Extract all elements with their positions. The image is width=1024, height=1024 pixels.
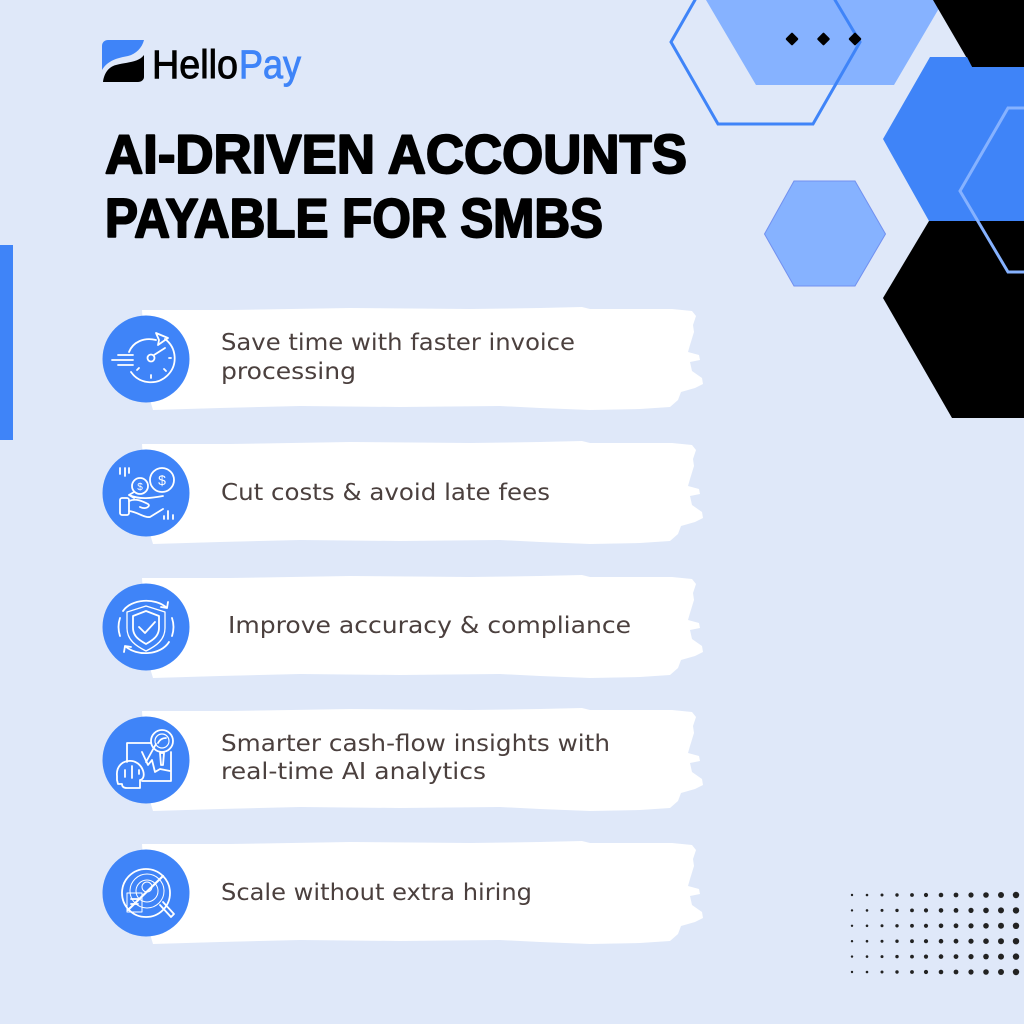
icon: stopwatch [102, 316, 190, 402]
row 4: insights [102, 708, 703, 811]
title: AI-DRIVEN ACCOUNTS [105, 123, 687, 185]
benefit text 1 [221, 330, 575, 385]
icon: shield with check [102, 584, 190, 670]
three diamond dots [787, 34, 860, 44]
benefit text 1: processing [221, 359, 356, 385]
brush stroke 1 [142, 307, 703, 410]
row 2: cut costs [102, 441, 703, 544]
row 1: save time [102, 307, 703, 410]
icon: hand with coins: $ [137, 482, 143, 493]
logo: HelloPay [102, 40, 301, 87]
benefit text 2: Cut costs & avoid late fees [221, 480, 550, 506]
logo mark [102, 40, 144, 82]
brush stroke 3 [142, 575, 703, 678]
benefit text 1: Save time with faster invoice [221, 330, 575, 356]
brush stroke 5 [142, 841, 703, 944]
black hexagon right [883, 221, 1024, 418]
icon: AI head with chart and magnifier [102, 716, 190, 804]
icon: no hiring magnifier [102, 850, 190, 936]
pale outlined hexagon right [960, 108, 1024, 272]
row 5: scale [102, 841, 703, 944]
brush stroke 4 [142, 708, 703, 811]
benefit text 4: real-time AI analytics [221, 759, 486, 785]
title [105, 123, 687, 249]
light blue hexagon top [706, 0, 944, 85]
title: PAYABLE FOR SMBS [105, 187, 603, 249]
hexagon cluster [671, 0, 1024, 418]
benefit text 5: Scale without extra hiring [221, 880, 532, 906]
benefit text 4: Smarter cash-flow insights with [221, 731, 610, 757]
outlined blue hexagon [671, 0, 860, 124]
blue hexagon right [883, 57, 1024, 221]
benefit text 4 [221, 731, 610, 785]
left accent bar [0, 245, 13, 440]
benefit text 3: Improve accuracy & compliance [228, 613, 631, 639]
black hexagon top right [933, 0, 1024, 67]
icon: hand with coins: $ [158, 472, 166, 488]
row 3: accuracy [102, 575, 703, 678]
mid light blue hexagon [764, 181, 886, 286]
icon: hand with coins [102, 450, 190, 536]
halftone dot grid [851, 892, 1019, 975]
brush stroke 2 [142, 441, 703, 544]
logo wordmark: Pay [239, 43, 301, 87]
logo wordmark: Hello [152, 43, 238, 87]
